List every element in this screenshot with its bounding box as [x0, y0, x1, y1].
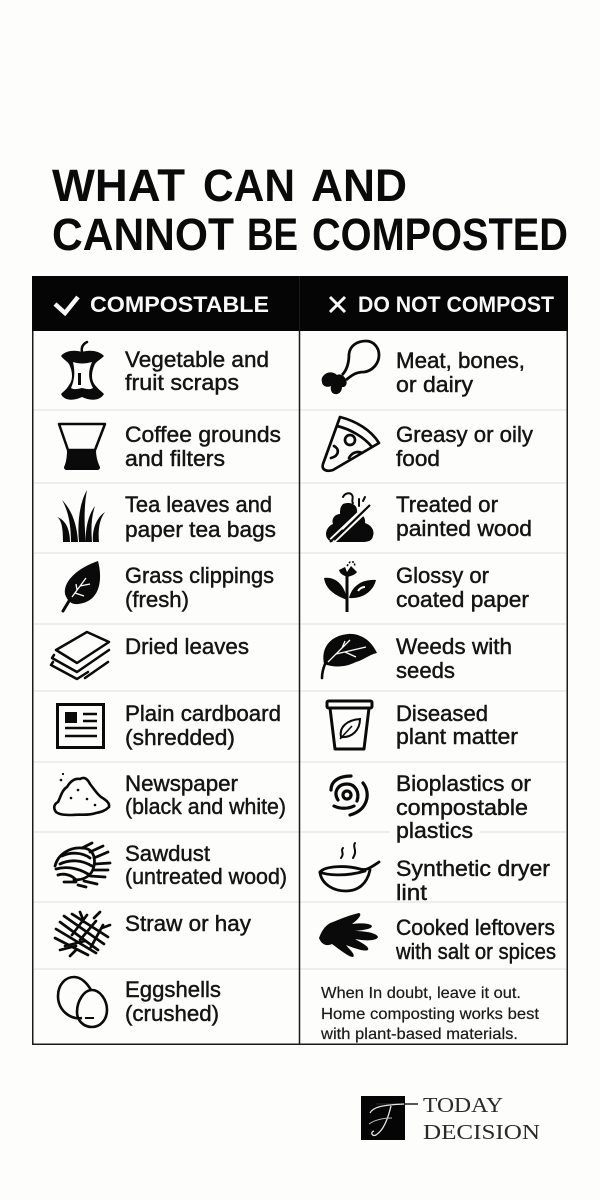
icon: check mark	[55, 297, 78, 313]
text: cooked leftovers with salt or spices: Cooked leftovers	[396, 915, 555, 940]
text: sawdust (untreated wood)	[125, 841, 287, 889]
icon: stacked layers	[51, 632, 109, 679]
icon: straw	[55, 912, 110, 956]
text: advice note: with plant-based materials.	[320, 1026, 518, 1043]
text: grass clippings (fresh): (fresh)	[125, 587, 189, 612]
text: bioplastics or compostable plastics: plastics	[396, 818, 473, 843]
icon: wood shavings	[55, 843, 110, 887]
icon: spiral	[331, 776, 367, 815]
icon: weed leaf	[322, 634, 377, 678]
text: tea leaves and paper tea bags	[125, 492, 276, 542]
text: tea leaves and paper tea bags: Tea leaves and	[125, 492, 272, 517]
text: advice note	[320, 985, 540, 1043]
icon: plant cup	[327, 701, 372, 749]
logo: today decision: TODAY	[423, 1093, 503, 1117]
text: advice note: When In doubt, leave it out.	[321, 985, 521, 1002]
text: cooked leftovers with salt or spices	[395, 915, 556, 964]
text: cooked leftovers with salt or spices: with salt or spices	[395, 939, 556, 964]
icon: chicken drumstick	[322, 341, 379, 394]
text: sawdust (untreated wood): (untreated wood)	[125, 864, 287, 889]
header: do not compost: DO NOT COMPOST	[358, 292, 555, 317]
icon: eggs	[58, 977, 107, 1027]
text: plain cardboard (shredded)	[125, 701, 281, 750]
text: grass clippings (fresh): Grass clippings	[125, 563, 274, 588]
icon: newspaper	[58, 704, 104, 748]
title: BE	[247, 209, 298, 260]
text: grass clippings (fresh)	[125, 563, 274, 612]
text: straw or hay: Straw or hay	[125, 911, 251, 936]
text: coffee grounds and filters: Coffee grounds	[125, 422, 281, 447]
title: WHAT	[52, 160, 185, 211]
header: do not compost	[300, 276, 568, 331]
text: synthetic dryer lint: Synthetic dryer	[396, 856, 550, 881]
text: newspaper (black and white): Newspaper	[125, 771, 238, 796]
text: plain cardboard (shredded): (shredded)	[125, 725, 235, 750]
text: greasy or oily food: food	[396, 446, 440, 471]
comparison table	[32, 276, 568, 1045]
icon: sawdust pile	[54, 773, 109, 815]
icon: pile with slash	[326, 493, 374, 542]
text: greasy or oily food: Greasy or oily	[396, 422, 533, 447]
text: tea leaves and paper tea bags: paper tea bags	[125, 517, 276, 542]
text: vegetable and fruit scraps: fruit scraps	[125, 370, 239, 395]
icon: leaf	[63, 561, 100, 611]
text: eggshells (crushed): (crushed)	[125, 1001, 219, 1026]
text: bioplastics or compostable plastics	[396, 771, 531, 843]
title: COMPOSTED	[312, 209, 568, 260]
icon: coffee filter	[59, 424, 105, 470]
text: weeds with seeds: seeds	[396, 658, 455, 683]
header: compostable	[32, 276, 299, 331]
text: synthetic dryer lint: lint	[396, 880, 427, 905]
logo: today decision: DECISION	[423, 1120, 540, 1144]
text: meat bones or dairy: Meat, bones,	[396, 348, 525, 373]
text: newspaper (black and white): (black and white)	[125, 794, 286, 819]
text: eggshells (crushed): Eggshells	[125, 977, 221, 1002]
text: diseased plant matter: Diseased	[396, 701, 488, 726]
title: AND	[311, 160, 407, 211]
text: dried leaves: Dried leaves	[125, 634, 249, 659]
text: coffee grounds and filters	[125, 422, 281, 471]
text: glossy or coated paper: Glossy or	[396, 563, 489, 588]
icon: apple core	[61, 342, 104, 400]
text: coffee grounds and filters: and filters	[125, 446, 225, 471]
title	[52, 160, 568, 260]
text: glossy or coated paper: coated paper	[396, 587, 529, 612]
text: eggshells (crushed)	[125, 977, 221, 1026]
logo: today decision	[361, 1093, 540, 1144]
text: greasy or oily food	[396, 422, 533, 471]
text: treated or painted wood: painted wood	[396, 516, 532, 541]
text: meat bones or dairy	[396, 348, 525, 397]
icon: hand	[319, 913, 378, 957]
text: weeds with seeds: Weeds with	[396, 634, 512, 659]
icon: flowering plant	[324, 562, 376, 612]
text: treated or painted wood: Treated or	[396, 492, 498, 517]
icon: grass	[57, 490, 105, 542]
text: newspaper (black and white)	[125, 771, 286, 819]
text: vegetable and fruit scraps: Vegetable and	[125, 347, 269, 372]
text: meat bones or dairy: or dairy	[396, 372, 473, 397]
header: compostable: COMPOSTABLE	[90, 292, 269, 317]
text: plain cardboard (shredded): Plain cardboard	[125, 701, 281, 726]
text: bioplastics or compostable plastics: Bioplastics or	[396, 771, 531, 796]
text: diseased plant matter: plant matter	[396, 724, 518, 749]
icon: cross	[330, 297, 345, 312]
text: treated or painted wood	[396, 492, 532, 541]
text: synthetic dryer lint	[396, 856, 550, 905]
icon: steaming bowl	[320, 843, 379, 891]
text: weeds with seeds	[396, 634, 512, 683]
text: bioplastics or compostable plastics: compostable	[396, 795, 528, 820]
text: diseased plant matter	[396, 701, 518, 749]
title: CAN	[203, 160, 295, 211]
text: glossy or coated paper	[396, 563, 529, 612]
icon: pizza slice	[323, 417, 379, 471]
title: CANNOT	[52, 209, 234, 260]
text: advice note: Home composting works best	[321, 1006, 540, 1023]
text: sawdust (untreated wood): Sawdust	[125, 841, 210, 866]
text: vegetable and fruit scraps	[125, 347, 269, 395]
